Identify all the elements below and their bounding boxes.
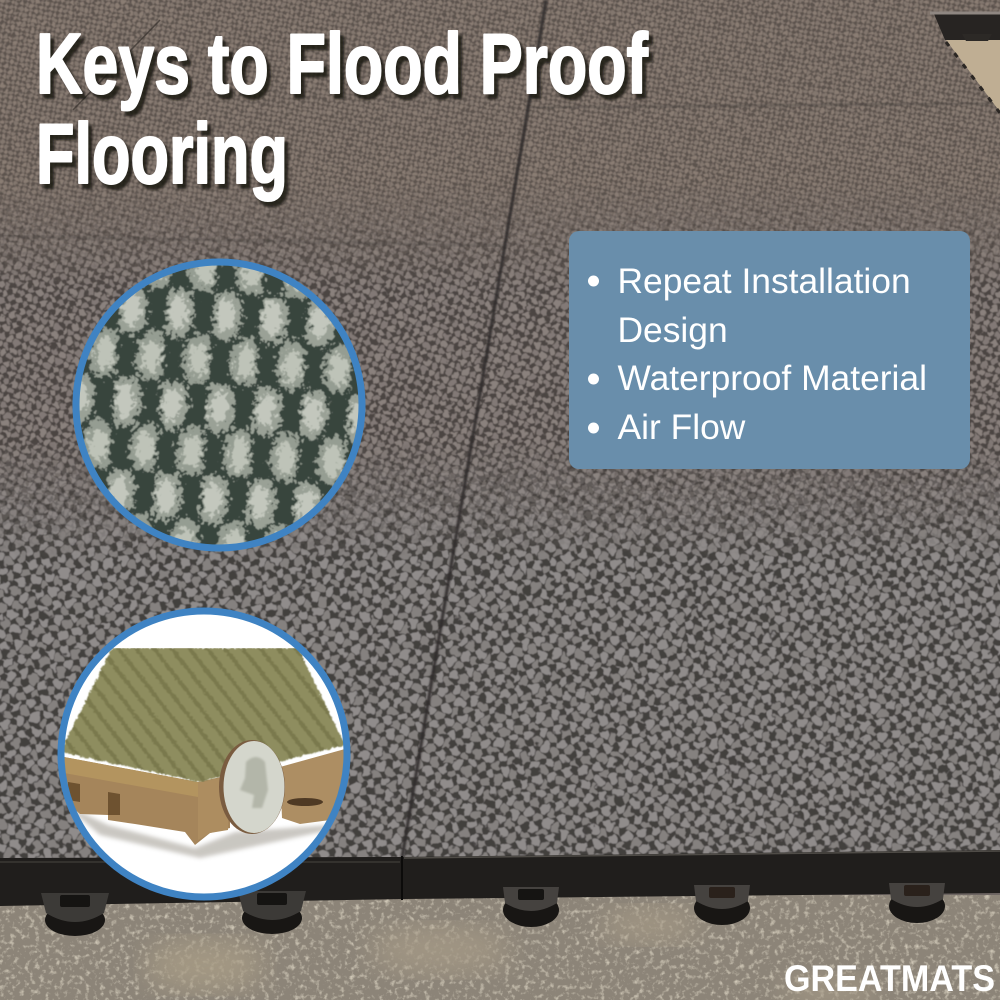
tile tan base (64, 757, 230, 845)
title shadow: Keys to Flood Proof (40, 22, 653, 117)
bullet list text: Repeat Installation (618, 261, 911, 301)
panel: key points list (569, 231, 970, 469)
title text (36, 17, 649, 202)
inset: carpet close-up circle (72, 258, 366, 552)
title shadow: Flooring (40, 112, 292, 207)
black tile edge strip (0, 850, 1000, 906)
bottom concrete floor (0, 895, 1000, 1000)
bullet list text: Waterproof Material (618, 358, 927, 398)
title (36, 17, 653, 207)
title text: Keys to Flood Proof (36, 17, 649, 112)
top right corner: floor edge (930, 13, 1000, 113)
inset: tile sample with quarter circle (60, 610, 348, 898)
bullet list text: Design (618, 310, 728, 350)
bullet list text (588, 261, 927, 447)
tile carpet top (60, 648, 345, 782)
quarter coin (219, 740, 285, 834)
title shadow (40, 22, 653, 207)
shadow under tile (76, 811, 325, 860)
title text: Flooring (36, 107, 288, 202)
interlock tabs (41, 883, 945, 936)
bullet list text: Air Flow (618, 407, 746, 447)
